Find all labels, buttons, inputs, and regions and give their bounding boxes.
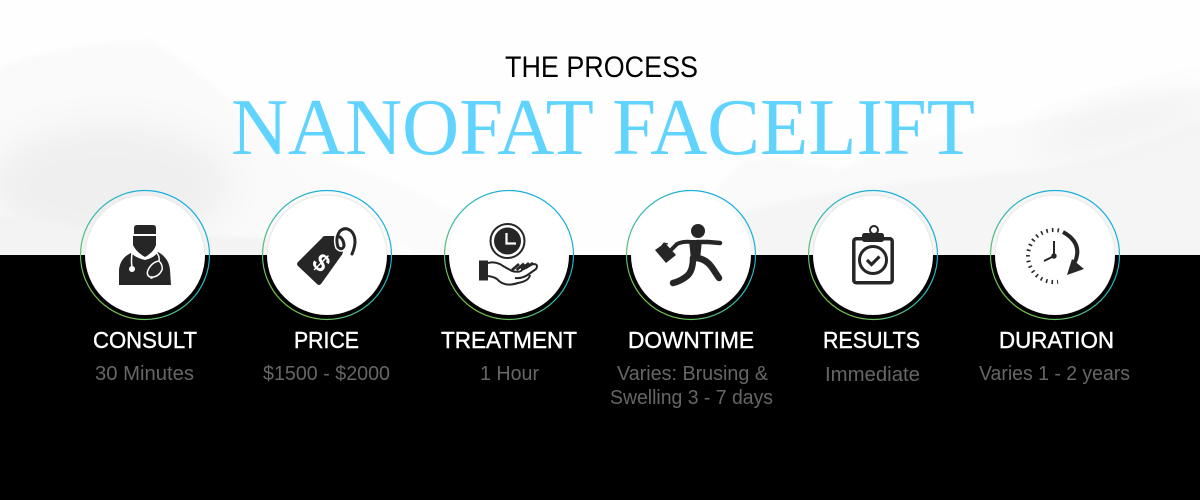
icon: clipboard with check: [854, 226, 892, 283]
step: downtime: [610, 190, 773, 409]
step: price: [262, 190, 392, 385]
step: duration: [979, 190, 1130, 385]
consult value: 30 Minutes: [95, 363, 194, 385]
price value: $1500 - $2000: [263, 363, 390, 385]
duration label: DURATION: [999, 327, 1114, 353]
step: results: [808, 190, 938, 386]
duration badge: [990, 190, 1120, 320]
results badge: [808, 190, 938, 320]
heading: the process: THE PROCESS: [505, 51, 698, 84]
consult badge: [80, 190, 210, 320]
treatment value: 1 Hour: [480, 363, 539, 385]
downtime value second line: Swelling 3 - 7 days: [610, 387, 773, 409]
price badge: [262, 190, 392, 320]
duration value: Varies 1 - 2 years: [979, 363, 1130, 385]
step: treatment: [441, 190, 577, 385]
downtime badge: [626, 190, 756, 320]
title: nanofat facelift: NANOFAT FACELIFT: [231, 84, 975, 172]
black lower panel: [0, 255, 1200, 500]
icon: running man with briefcase: [655, 224, 720, 283]
icon: doctor: [119, 225, 171, 285]
results value: Immediate: [825, 364, 920, 386]
icon: price tag: $: [306, 248, 336, 278]
consult label: CONSULT: [93, 327, 197, 353]
background: light wave panel: [0, 0, 1200, 265]
icon: clock with clockwise arrow: [1028, 230, 1084, 282]
icon: price tag: [297, 229, 355, 285]
treatment badge: [444, 190, 574, 320]
downtime value: Varies: Brusing &: [617, 363, 769, 385]
downtime label: DOWNTIME: [628, 327, 754, 353]
results label: RESULTS: [823, 327, 920, 353]
icon: clock over open hand: [479, 224, 537, 285]
price label: PRICE: [294, 327, 359, 353]
treatment label: TREATMENT: [441, 327, 577, 353]
step: consult: [80, 190, 210, 385]
